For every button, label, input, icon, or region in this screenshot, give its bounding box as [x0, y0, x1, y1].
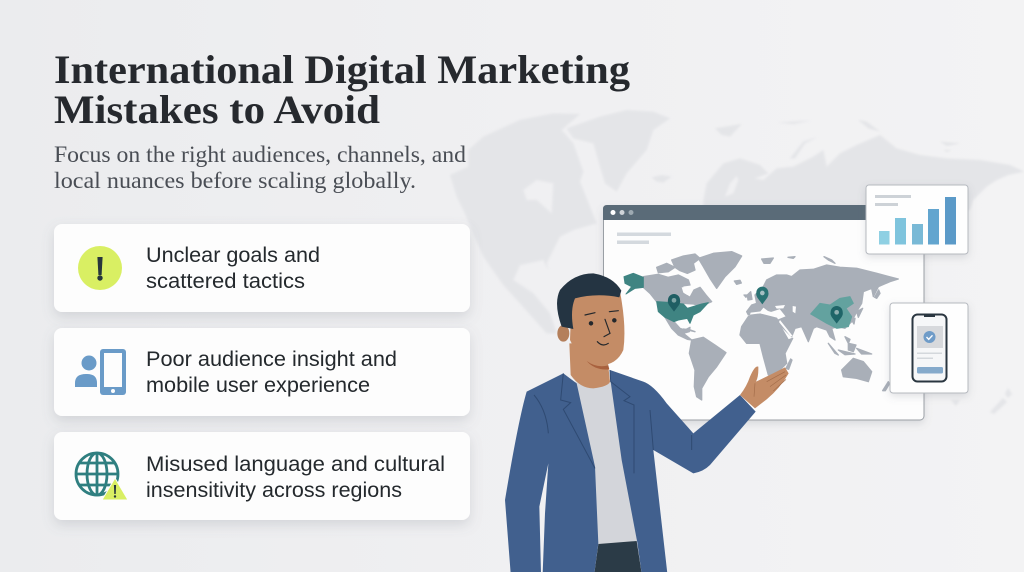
- pin: Asia: [830, 306, 843, 324]
- facial features: [585, 311, 618, 345]
- title: International Digital Marketing: [54, 47, 630, 92]
- icon: phone with check: [912, 314, 946, 382]
- background world map: [450, 110, 1024, 414]
- map water details: [682, 287, 796, 337]
- text: audience insight: Poor audience insight and: [146, 348, 397, 371]
- bar chart: [879, 197, 956, 244]
- panel: misused language: [54, 432, 470, 520]
- subtitle: local nuances before scaling globally.: [54, 168, 416, 193]
- hair: [557, 273, 621, 329]
- panel: browser window with map: [603, 205, 924, 420]
- panel: bar chart card: [866, 185, 968, 254]
- ear: [557, 325, 569, 342]
- panel: unclear goals: [54, 224, 470, 312]
- map land masses: [643, 252, 898, 400]
- title: Mistakes to Avoid: [54, 87, 380, 132]
- hand: [740, 366, 789, 408]
- background map: Eurasia: [703, 120, 1024, 210]
- text: misused language: insensitivity across regions: [146, 479, 402, 502]
- world map: [624, 252, 898, 400]
- pin: Europe: [756, 287, 769, 304]
- browser heading lines: [617, 232, 671, 244]
- text: unclear goals: Unclear goals and: [146, 244, 320, 267]
- panel: phone card: [890, 303, 968, 393]
- region: United States: [657, 302, 708, 323]
- text: unclear goals: [146, 244, 320, 293]
- text: unclear goals: scattered tactics: [146, 270, 305, 293]
- subtitle: Focus on the right audiences, channels, and: [54, 142, 467, 167]
- neck shadow: [587, 361, 609, 369]
- background map: New Zealand and Tasmania: [951, 388, 1012, 414]
- pin: North America: [668, 294, 680, 312]
- text: misused language: [146, 453, 445, 502]
- trousers: [594, 541, 642, 572]
- background map: North America and Greenland: [450, 110, 672, 333]
- face: [570, 291, 624, 365]
- panel: audience insight: [54, 328, 470, 416]
- text: misused language: Misused language and cultural: [146, 453, 445, 476]
- illustration: presenter: [505, 273, 789, 572]
- shirt: [575, 380, 637, 545]
- subtitle: [54, 142, 467, 193]
- neck: [569, 343, 610, 388]
- title: [54, 47, 630, 132]
- icon: person and phone: [75, 349, 126, 395]
- region: China: [811, 297, 853, 328]
- jacket: [505, 370, 756, 572]
- icon: exclamation circle: [78, 246, 122, 290]
- region: Alaska: [624, 273, 643, 294]
- chart heading lines: [875, 195, 911, 206]
- icon: globe with warning: [76, 453, 128, 500]
- text: audience insight: mobile user experience: [146, 374, 370, 397]
- text: audience insight: [146, 348, 397, 397]
- browser title bar: [603, 205, 924, 220]
